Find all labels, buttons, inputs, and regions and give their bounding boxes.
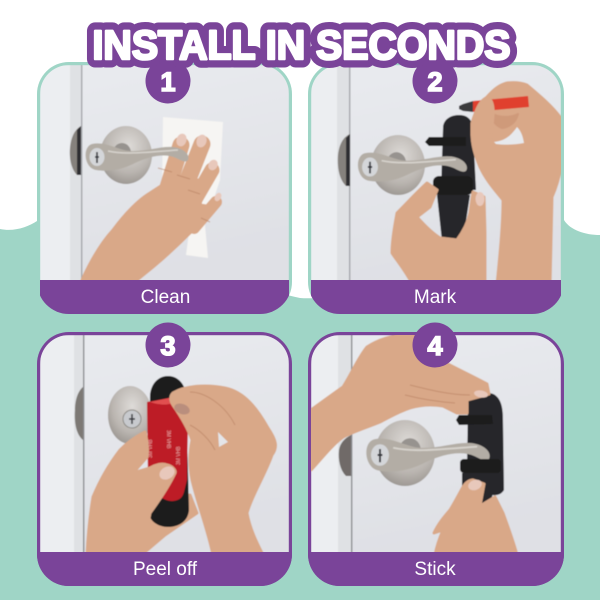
- badge: number 3: [146, 322, 190, 368]
- adhesive plate: 3M VHB: [148, 439, 154, 458]
- badge: number 3: 3: [160, 331, 176, 361]
- badge: number 1: 1: [160, 67, 176, 97]
- caption bar: Clean: [40, 280, 289, 314]
- adhesive plate: [147, 376, 189, 527]
- caption bar: Mark: [311, 280, 561, 314]
- caption bar: Peel off: Peel off: [133, 559, 198, 580]
- photo: hand wiping door: [40, 65, 289, 285]
- badge: number 2: 2: [427, 67, 443, 97]
- photo: sticking the lock: [311, 335, 561, 555]
- panel: step 2 mark: [308, 62, 564, 314]
- photo: marking with pen: [311, 65, 561, 285]
- background wave: [0, 215, 600, 600]
- caption bar: Mark: Mark: [414, 287, 457, 308]
- photo: peeling adhesive tape: [40, 335, 289, 555]
- icon: red marker: [459, 96, 529, 112]
- title: INSTALL IN SECONDS: [92, 22, 510, 68]
- badge: number 1: [146, 58, 190, 104]
- caption bar: Stick: [308, 552, 564, 586]
- panel: step 3 peel off: [37, 332, 292, 586]
- caption bar: Clean: Clean: [141, 287, 190, 308]
- badge: number 4: [412, 322, 458, 368]
- adhesive plate: 3M VHB: [165, 430, 171, 449]
- panel: step 4 stick: [308, 332, 564, 586]
- caption bar: Peel off: [37, 552, 292, 586]
- badge: number 4: 4: [427, 331, 443, 361]
- title: INSTALL IN SECONDS: [92, 22, 510, 68]
- badge: number 2: [412, 58, 458, 104]
- panel: step 1 clean: [37, 62, 292, 314]
- caption bar: Stick: Stick: [414, 559, 456, 580]
- adhesive plate: 3M VHB: [176, 446, 182, 465]
